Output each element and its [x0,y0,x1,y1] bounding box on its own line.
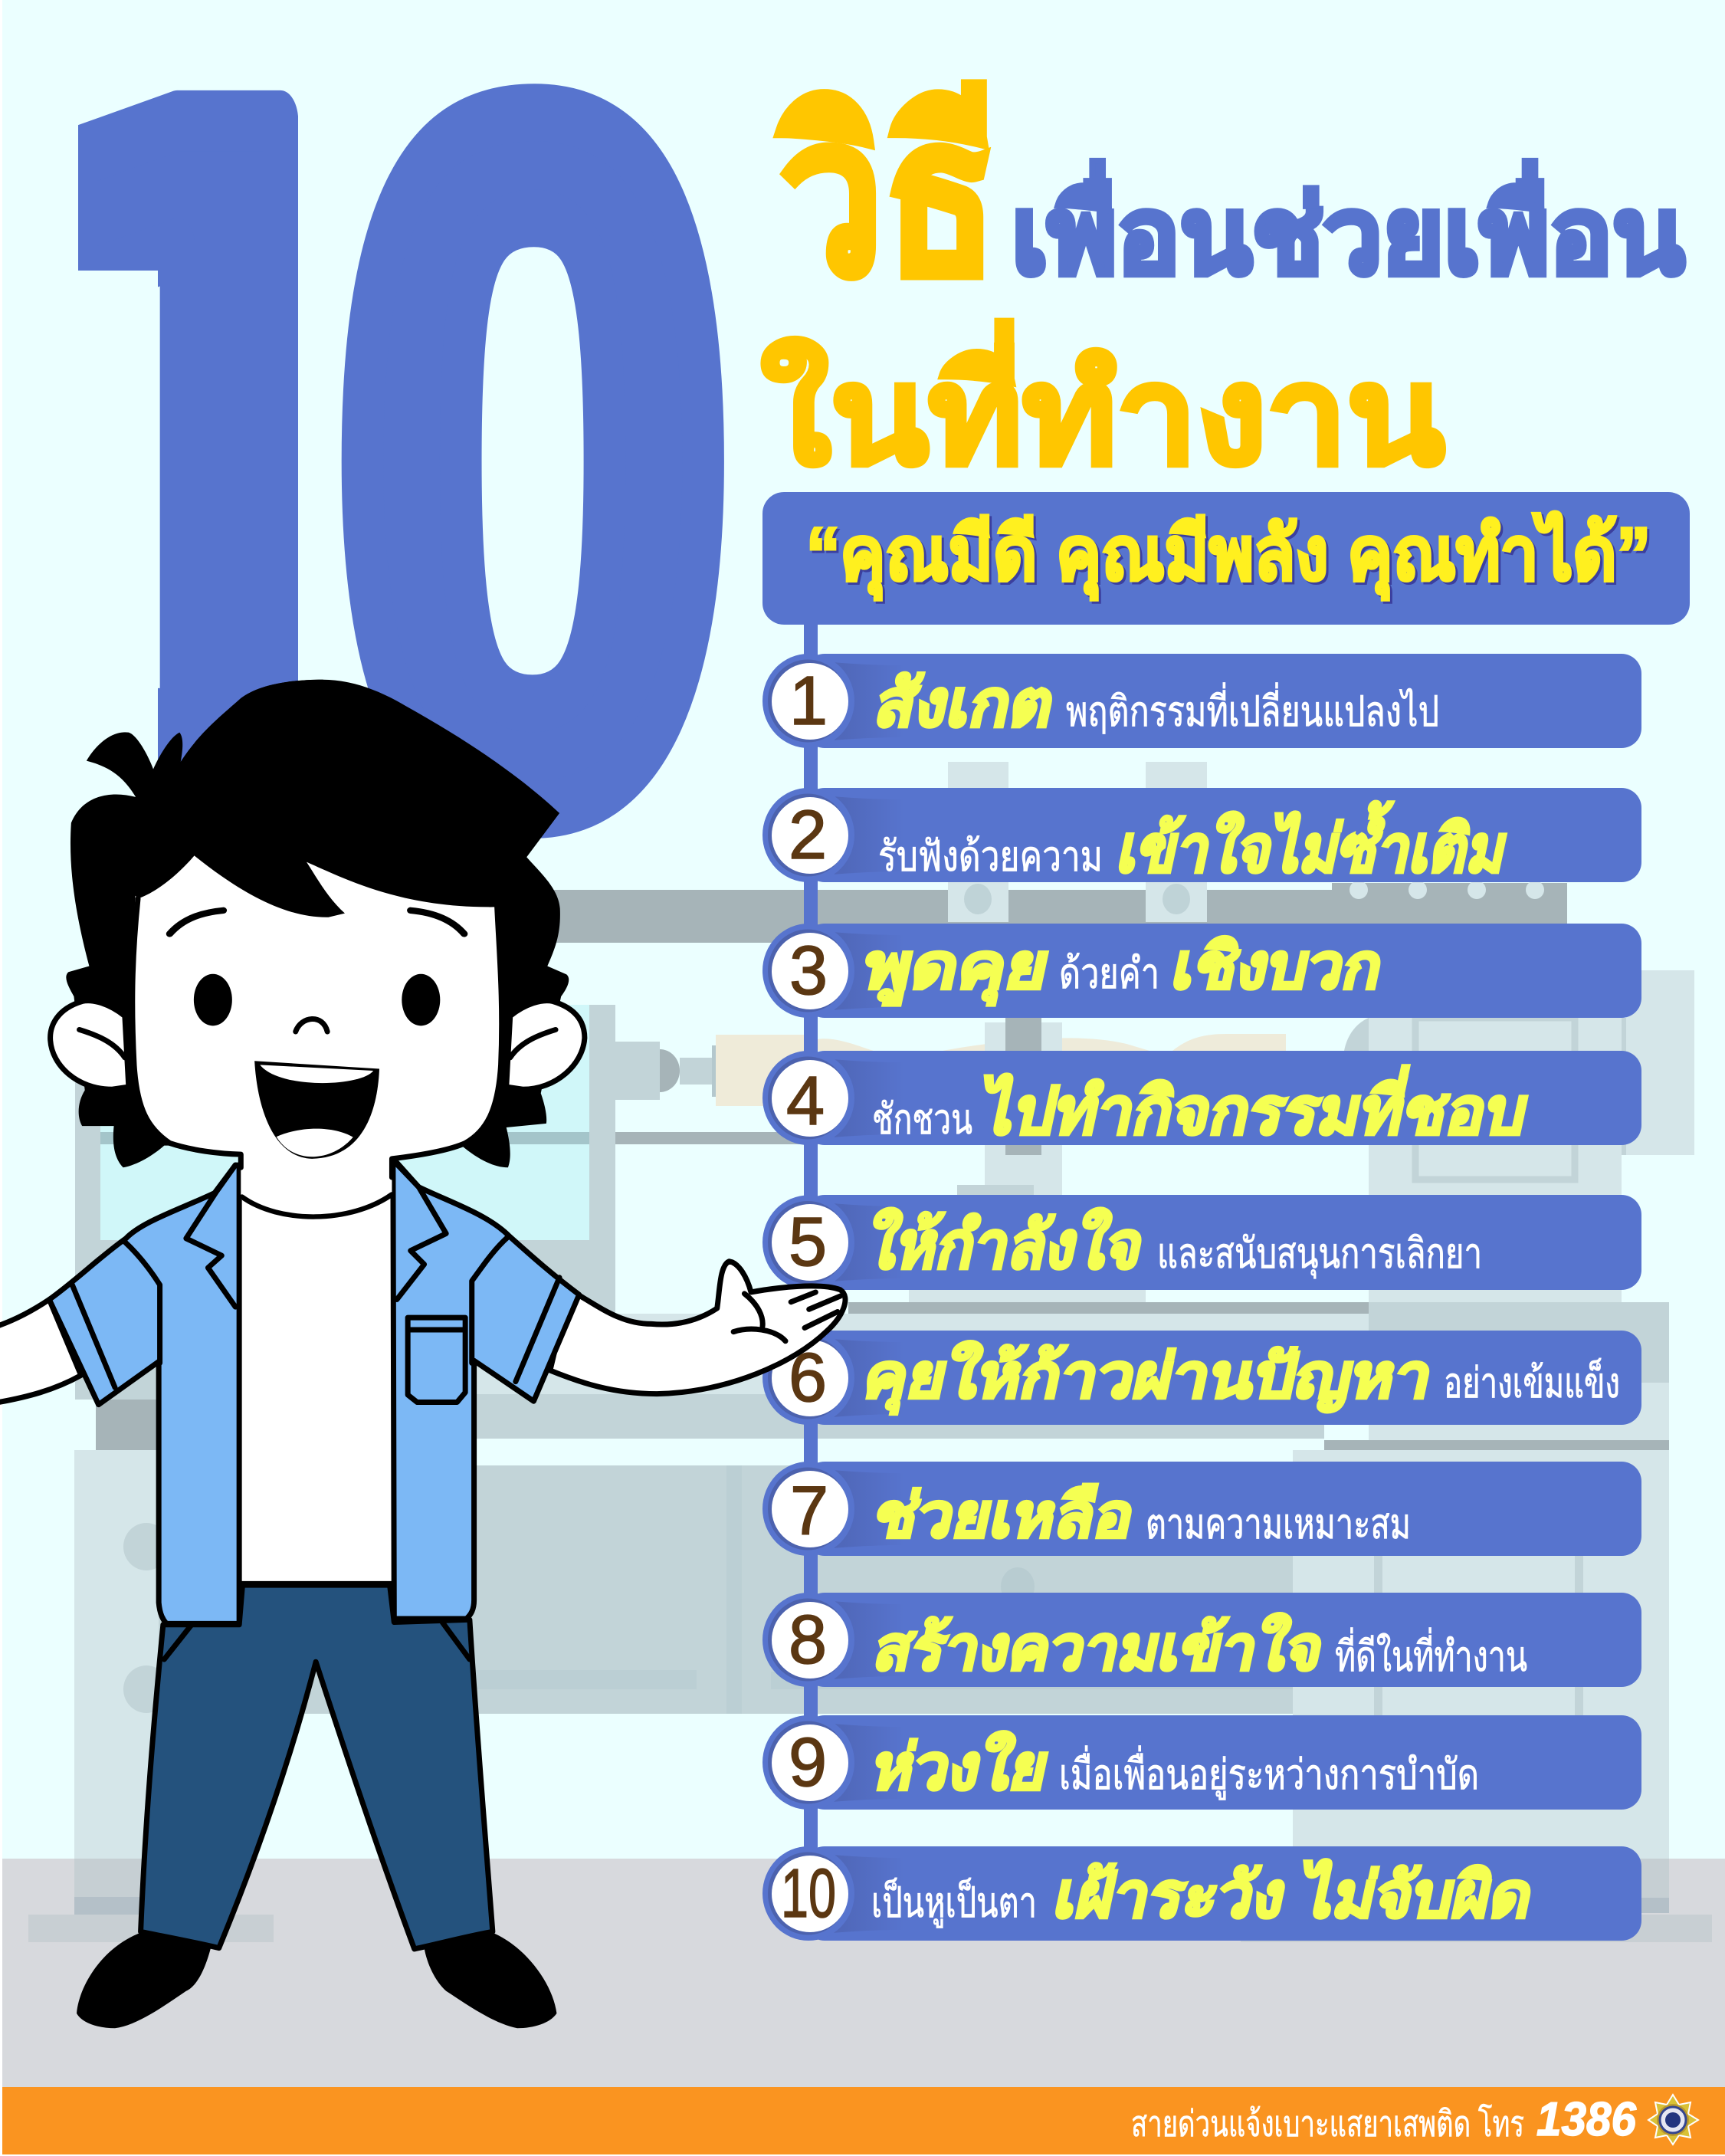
step 8: สร้างความเข้าใจ [868,1613,1331,1683]
step 9 [762,1715,1641,1810]
footer hotline text: สายด่วนแจ้งเบาะแสยาเสพติด โทร [1131,2103,1524,2144]
vertical connector line [804,621,818,1847]
mouth [254,1061,379,1159]
ear lines [80,1029,556,1058]
right jacket [393,1160,579,1619]
slogan panel [762,492,1690,625]
footer band [2,2087,1725,2154]
step 9: ห่วงใย [866,1731,1056,1803]
step 8 [762,1593,1641,1687]
title: ในที่ทำงาน: ในที่ทำงาน [761,320,1445,492]
shirt hem [241,1580,392,1587]
step 7 [762,1462,1641,1556]
step 7: ช่วยเหลือ [867,1482,1141,1551]
step 6: 6 [789,1340,827,1416]
step 3: 3 [789,933,828,1009]
step 1: 1 [789,663,828,740]
step 4 [762,1051,1641,1148]
step 2: รับฟังด้วยความ [878,832,1103,880]
step 2: เข้าใจไม่ซ้ำเติม [1112,801,1518,886]
face [133,845,502,1217]
nose [296,1019,327,1032]
step 10 [762,1846,1641,1941]
step 4: 4 [786,1063,825,1140]
step 1 [762,654,1641,748]
slogan shadow: “คุณมีดี คุณมีพลัง คุณทำได้” [808,514,1653,603]
left ear [51,1001,129,1089]
right shoe [425,1933,556,2028]
floor [2,1859,1725,2087]
step 10: 10 [781,1856,836,1932]
icon: emblem [1648,2095,1698,2145]
step 4: ไปทำกิจกรรมที่ชอบ [969,1065,1537,1148]
step 6 [762,1331,1641,1425]
right ear [507,1001,585,1089]
fringe [71,680,559,917]
step 6: อย่างเข้มแข็ง [1444,1358,1620,1406]
footer hotline number: 1386 [1536,2093,1636,2146]
step 2: 2 [789,797,827,874]
title: วิธี: วิธี [776,74,998,320]
step 8: ที่ดีในที่ทำงาน [1335,1627,1527,1680]
collar neckline [242,1194,392,1217]
step 3 [762,924,1641,1018]
step 3: เชิงบวก [1166,931,1390,1002]
step 9: เมื่อเพื่อนอยู่ระหว่างการบำบัด [1059,1745,1479,1800]
step 10: เฝ้าระวัง ไม่จับผิด [1048,1859,1540,1931]
step 3: ด้วยคำ [1059,950,1159,997]
step 4: ชักชวน [872,1095,972,1143]
step 5: และสนับสนุนการเลิกยา [1157,1229,1482,1279]
hand creases [733,1292,840,1341]
step 10: เป็นหูเป็นตา [871,1878,1037,1928]
step 1: สังเกต [869,668,1061,740]
step 5 [762,1195,1641,1290]
step 9: 9 [789,1724,827,1801]
slogan text: “คุณมีดี คุณมีพลัง คุณทำได้” [806,511,1651,601]
big number 10 [14,0,733,1085]
step 2 [762,788,1641,886]
step 8: 8 [789,1602,827,1679]
jacket details [72,1163,559,1387]
left arm [0,1300,81,1403]
character [0,680,845,2028]
pocket [408,1318,465,1402]
step 1: พฤติกรรมที่เปลี่ยนแปลงไป [1066,682,1439,735]
title: เพื่อนช่วยเพื่อน: เพื่อนช่วยเพื่อน [1012,160,1684,296]
trousers [141,1585,493,1949]
trouser pockets [164,1623,470,1659]
step 7: ตามความเหมาะสม [1146,1500,1411,1547]
upper body [0,680,845,1623]
white t-shirt [239,1177,394,1583]
right arm and hand [550,1262,845,1394]
left jacket [49,1165,239,1623]
left shoe [77,1933,211,2028]
back hair [66,680,569,1167]
step 5: 5 [789,1204,827,1281]
eyebrows [169,911,464,934]
lower body [77,1583,556,2028]
workshop machinery backdrop [28,762,1712,1942]
step 7: 7 [790,1473,828,1550]
face outline [133,899,502,1177]
step 3: พูดคุย [857,931,1057,1006]
eyes [194,974,440,1025]
step 5: ให้กำลังใจ [861,1209,1151,1282]
step 6: คุยให้ก้าวผ่านปัญหา [857,1341,1440,1415]
